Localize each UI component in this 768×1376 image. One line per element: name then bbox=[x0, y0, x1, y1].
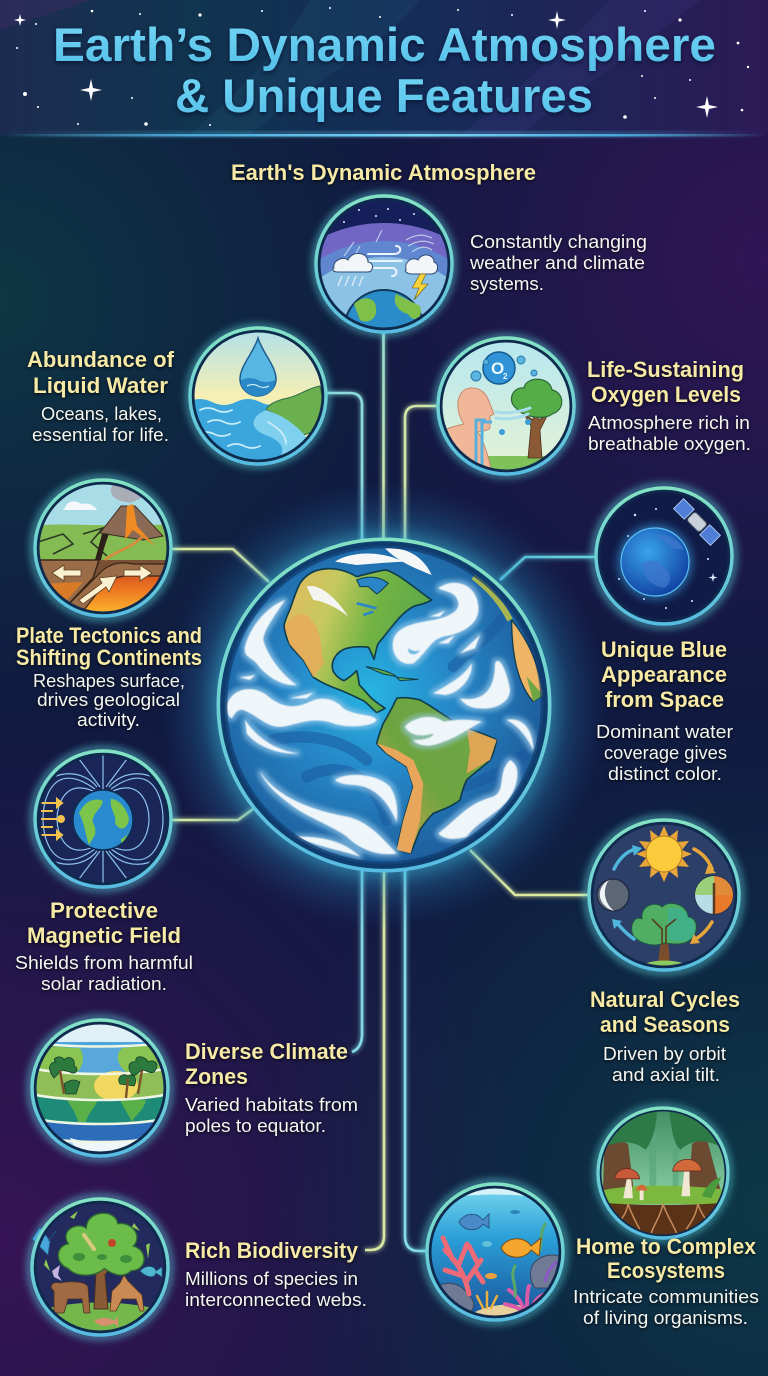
text: magnetic field title bbox=[27, 898, 181, 948]
icon: climate bands on a globe bbox=[30, 1018, 170, 1158]
text: water title: Abundance of bbox=[27, 347, 175, 372]
text: oxygen title: Life-Sustaining bbox=[587, 357, 744, 382]
text: water title: Liquid Water bbox=[33, 373, 168, 398]
text: blue appearance title: from Space bbox=[605, 687, 724, 712]
icon: tree with animals bbox=[30, 1197, 170, 1337]
text: oxygen title: Oxygen Levels bbox=[591, 382, 741, 407]
panel: oxygen bbox=[436, 336, 751, 476]
panel: liquid water bbox=[27, 326, 328, 468]
text: ecosystems description: of living organisms. bbox=[583, 1308, 748, 1328]
icon: water drop and river bbox=[188, 326, 328, 468]
text: water title bbox=[27, 347, 175, 398]
text: plate tectonics title: Plate Tectonics and bbox=[16, 623, 202, 648]
text: magnetic field description: Shields from harmful bbox=[15, 953, 193, 973]
connector: water to globe bbox=[326, 393, 362, 548]
text: climate zones title: Zones bbox=[185, 1064, 248, 1089]
panel: magnetic field bbox=[15, 749, 193, 994]
text: magnetic field description bbox=[15, 953, 193, 994]
text: plate tectonics description: activity. bbox=[77, 710, 140, 730]
header banner with stars bbox=[0, 0, 768, 137]
text: biodiversity description: Millions of species in bbox=[185, 1269, 358, 1289]
text: blue appearance description bbox=[596, 722, 733, 784]
text: oxygen title bbox=[587, 357, 744, 407]
text: biodiversity description bbox=[185, 1269, 367, 1310]
text: plate tectonics description: drives geological bbox=[37, 690, 180, 710]
text: blue appearance description: distinct color. bbox=[608, 764, 722, 784]
text: oxygen description: Atmosphere rich in bbox=[588, 413, 750, 433]
text: water description: essential for life. bbox=[32, 425, 169, 445]
text: atmosphere description: systems. bbox=[470, 274, 544, 294]
connector: climate zones to globe bbox=[352, 865, 362, 1052]
panel: ecosystems bbox=[573, 1105, 759, 1328]
text: natural cycles description: Driven by orbit bbox=[603, 1044, 726, 1064]
text: ecosystems title bbox=[576, 1234, 757, 1283]
panel: ocean life bbox=[425, 1182, 565, 1322]
icon: person breathing and tree: 2 bbox=[503, 372, 508, 381]
icon: person breathing and tree bbox=[436, 336, 576, 476]
connector: ecosystems to globe bbox=[405, 868, 428, 1251]
text: climate zones description bbox=[185, 1095, 358, 1136]
connector: atmosphere to globe bbox=[382, 332, 385, 545]
connector: oxygen to globe bbox=[405, 406, 438, 546]
connector: magnetic field to globe bbox=[172, 809, 253, 820]
text: natural cycles title bbox=[590, 987, 740, 1037]
connector: biodiversity to globe bbox=[365, 868, 384, 1250]
panel: plate tectonics bbox=[16, 478, 202, 730]
text: atmosphere description: weather and climate bbox=[469, 253, 645, 273]
text: natural cycles title: Natural Cycles bbox=[590, 987, 740, 1012]
text: magnetic field title: Magnetic Field bbox=[27, 923, 181, 948]
text: plate tectonics description: Reshapes surface, bbox=[33, 671, 185, 691]
connector: plate tectonics to globe bbox=[172, 549, 269, 582]
text: blue appearance description: coverage gives bbox=[604, 743, 727, 763]
text: blue appearance title: Appearance bbox=[601, 662, 727, 687]
text: ecosystems description bbox=[573, 1287, 759, 1328]
panel: natural cycles bbox=[586, 817, 742, 1085]
text: biodiversity description: interconnected webs. bbox=[185, 1290, 367, 1310]
heading: Earth's Dynamic Atmosphere: Earth's Dynamic Atmosphere bbox=[231, 160, 536, 185]
text: atmosphere description: Constantly changing bbox=[470, 232, 647, 252]
text: ecosystems description: Intricate communities bbox=[573, 1287, 759, 1307]
panel: biodiversity bbox=[30, 1197, 367, 1337]
icon: person breathing and tree: O bbox=[491, 359, 504, 378]
panel: blue appearance bbox=[594, 486, 734, 784]
text: ecosystems title: Home to Complex bbox=[576, 1234, 757, 1259]
connector: blue appearance to globe bbox=[500, 557, 595, 580]
text: climate zones description: Varied habitats from bbox=[185, 1095, 358, 1115]
text: ecosystems title: Ecosystems bbox=[607, 1258, 725, 1283]
text: plate tectonics title bbox=[16, 623, 202, 670]
text: atmosphere description bbox=[469, 232, 647, 294]
title: & Unique Features bbox=[175, 69, 593, 122]
icon: blue planet and satellite bbox=[594, 486, 734, 626]
icon: volcano and plates bbox=[33, 478, 173, 618]
icon: forest floor with mushrooms bbox=[595, 1105, 731, 1241]
text: water description: Oceans, lakes, bbox=[41, 404, 162, 424]
text: climate zones title: Diverse Climate bbox=[185, 1039, 348, 1064]
text: water description bbox=[32, 404, 169, 445]
central globe bbox=[159, 480, 609, 930]
title bbox=[53, 18, 716, 122]
text: natural cycles description bbox=[603, 1044, 726, 1085]
panel: atmosphere bbox=[307, 187, 648, 341]
text: oxygen description: breathable oxygen. bbox=[588, 434, 751, 454]
text: climate zones description: poles to equator. bbox=[185, 1116, 326, 1136]
text: natural cycles title: and Seasons bbox=[600, 1012, 730, 1037]
connector: natural cycles to globe bbox=[470, 850, 588, 895]
text: magnetic field description: solar radiation. bbox=[41, 974, 167, 994]
text: plate tectonics title: Shifting Continents bbox=[16, 645, 202, 670]
text: climate zones title bbox=[185, 1039, 348, 1089]
icon: atmosphere layers bbox=[307, 187, 461, 341]
text: plate tectonics description bbox=[33, 671, 185, 730]
text: natural cycles description: and axial tilt. bbox=[612, 1065, 720, 1085]
text: blue appearance description: Dominant water bbox=[596, 722, 733, 742]
icon: coral reef and fish bbox=[425, 1182, 565, 1322]
text: blue appearance title: Unique Blue bbox=[601, 637, 727, 662]
text: blue appearance title bbox=[601, 637, 727, 712]
icon: earth with magnetic field lines bbox=[33, 749, 173, 889]
text: magnetic field title: Protective bbox=[50, 898, 158, 923]
panel: climate zones bbox=[30, 1018, 358, 1158]
text: oxygen description bbox=[588, 413, 751, 454]
icon: sun moon and seasons cycle bbox=[586, 817, 742, 973]
text: biodiversity title: Rich Biodiversity bbox=[185, 1238, 359, 1263]
title: Earth’s Dynamic Atmosphere bbox=[53, 18, 716, 71]
